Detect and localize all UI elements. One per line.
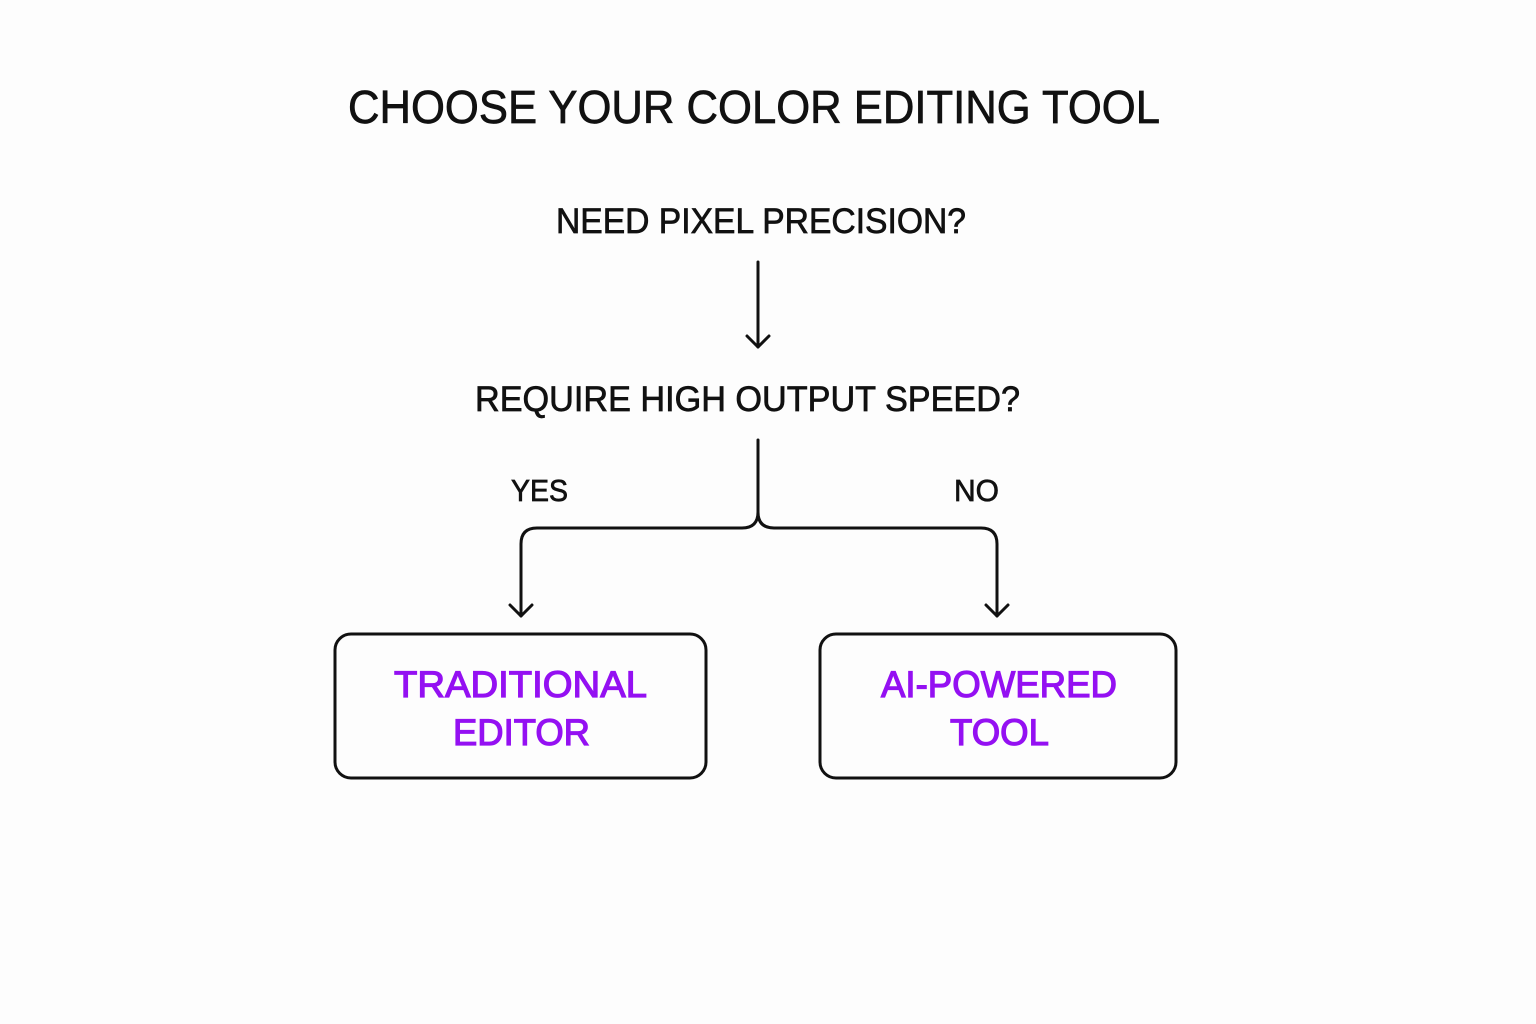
question: output speed: REQUIRE HIGH OUTPUT SPEED? [475, 380, 1020, 419]
box: traditional editor: EDITOR [453, 712, 590, 753]
title: CHOOSE YOUR COLOR EDITING TOOL [348, 81, 1160, 133]
question: pixel precision: NEED PIXEL PRECISION? [556, 202, 966, 241]
label: no: NO [954, 473, 999, 508]
box: ai-powered tool: AI-POWERED [881, 664, 1117, 705]
box: ai-powered tool [820, 634, 1176, 778]
arrow: down to second question [747, 262, 769, 347]
box: ai-powered tool: TOOL [950, 712, 1049, 753]
box: traditional editor: TRADITIONAL [394, 664, 647, 705]
label: yes: YES [511, 473, 568, 508]
arrow: branching [510, 440, 1008, 616]
box: traditional editor [335, 634, 706, 778]
